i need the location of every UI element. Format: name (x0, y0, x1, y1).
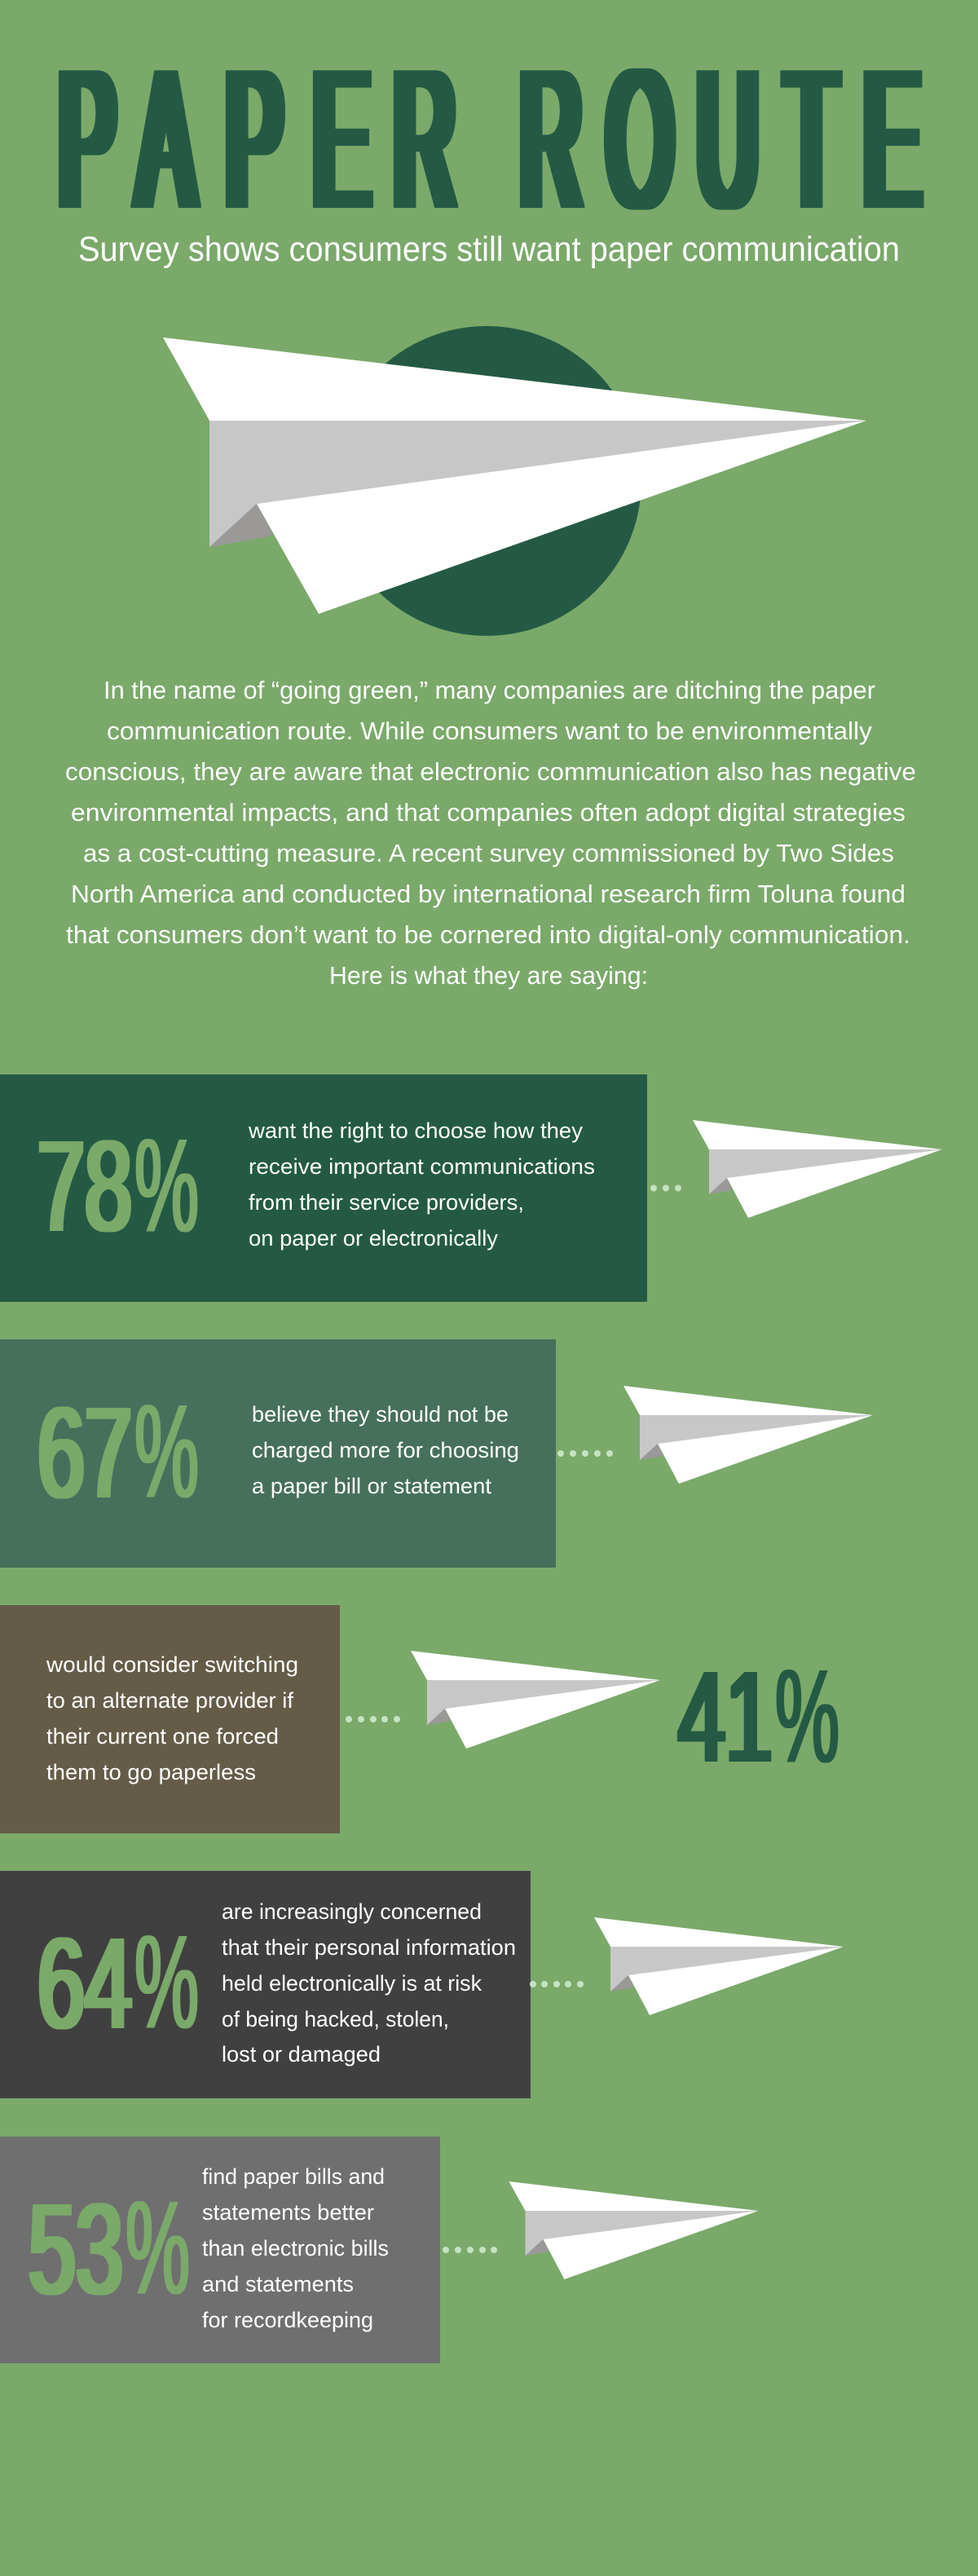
intro paragraph: Here is what they are saying: (329, 961, 648, 990)
intro paragraph: as a cost-cutting measure. A recent survey commissioned by Two Sides (83, 839, 894, 867)
text: 64% description: of being hacked, stolen, (222, 2007, 449, 2031)
stat 41%: 41 (678, 1646, 773, 1789)
panel: 41% (0, 1605, 340, 1833)
dots and plane 2 (557, 1386, 873, 1484)
text: 78% description: on paper or electronically (249, 1226, 499, 1251)
intro paragraph: that consumers don’t want to be cornered into digital-only communication. (66, 920, 910, 949)
text: 64% description: held electronically is at risk (222, 1971, 482, 1996)
text: 64% description (222, 1899, 516, 2067)
text: 53% description: statements better (202, 2200, 374, 2225)
hero: paper plane and circle (163, 326, 866, 636)
intro paragraph: conscious, they are aware that electronic communication also has negative (65, 757, 916, 786)
stat 41%: % (775, 1643, 839, 1790)
panel: 53% (0, 2137, 440, 2363)
text: 53% description: and statements (202, 2272, 354, 2296)
text: 41% description: would consider switching (46, 1652, 298, 1677)
text: 78% description (248, 1118, 595, 1251)
stat 64%: 64 (37, 1912, 132, 2055)
text: 53% description: find paper bills and (202, 2164, 385, 2189)
panel: 64% (0, 1871, 531, 2098)
icon: large paper plane (163, 337, 866, 614)
text: 53% description: for recordkeeping (202, 2308, 373, 2332)
panel: 67% (0, 1339, 556, 1568)
circle (332, 326, 641, 636)
icon: paper plane (623, 1386, 873, 1484)
dots and plane 4 (530, 1917, 844, 2015)
text: 41% description: to an alternate provider if (46, 1688, 293, 1713)
stat 78%: % (134, 1112, 199, 1259)
stat 53%: 53 (29, 2178, 123, 2321)
icon: paper plane (509, 2181, 758, 2279)
stat 67%: % (134, 1378, 199, 1525)
text: 67% description: charged more for choosing (252, 1438, 519, 1462)
text: 53% description (202, 2164, 389, 2332)
intro paragraph: In the name of “going green,” many companies are ditching the paper (104, 676, 875, 704)
intro paragraph (65, 676, 916, 990)
title: PAPER ROUTE (59, 30, 920, 249)
text: 78% description: from their service providers, (249, 1190, 524, 1215)
dots and plane 1 (650, 1120, 942, 1218)
dots and plane 3 (346, 1651, 660, 1749)
text: 67% description: believe they should not be (252, 1402, 509, 1427)
text: 64% description: lost or damaged (222, 2042, 381, 2067)
text: 41% description: their current one forced (46, 1724, 279, 1749)
text: 67% description: a paper bill or statement (252, 1474, 491, 1498)
stat 78%: 78 (37, 1115, 132, 1258)
text: 41% description (46, 1652, 298, 1784)
text: 41% description: them to go paperless (46, 1760, 256, 1784)
text: 78% description: receive important communications (249, 1154, 595, 1179)
icon: paper plane (411, 1651, 660, 1749)
stat 53%: % (126, 2174, 190, 2322)
text: 78% description: want the right to choose how they (248, 1118, 584, 1143)
stat 67%: 67 (37, 1382, 132, 1524)
text: 64% description: that their personal information (222, 1935, 516, 1960)
text: 67% description (252, 1402, 519, 1498)
intro paragraph: communication route. While consumers want to be environmentally (107, 717, 873, 745)
dots and plane 5 (443, 2181, 758, 2279)
text: 53% description: than electronic bills (202, 2236, 389, 2261)
stat 64%: % (134, 1908, 199, 2056)
panel: 78% (0, 1074, 647, 1302)
text: 64% description: are increasingly concerned (222, 1899, 482, 1924)
subtitle: Survey shows consumers still want paper communication (78, 230, 900, 269)
icon: paper plane (693, 1120, 942, 1218)
icon: paper plane (594, 1917, 844, 2015)
intro paragraph: environmental impacts, and that companies often adopt digital strategies (71, 798, 905, 827)
intro paragraph: North America and conducted by international research firm Toluna found (71, 880, 905, 908)
